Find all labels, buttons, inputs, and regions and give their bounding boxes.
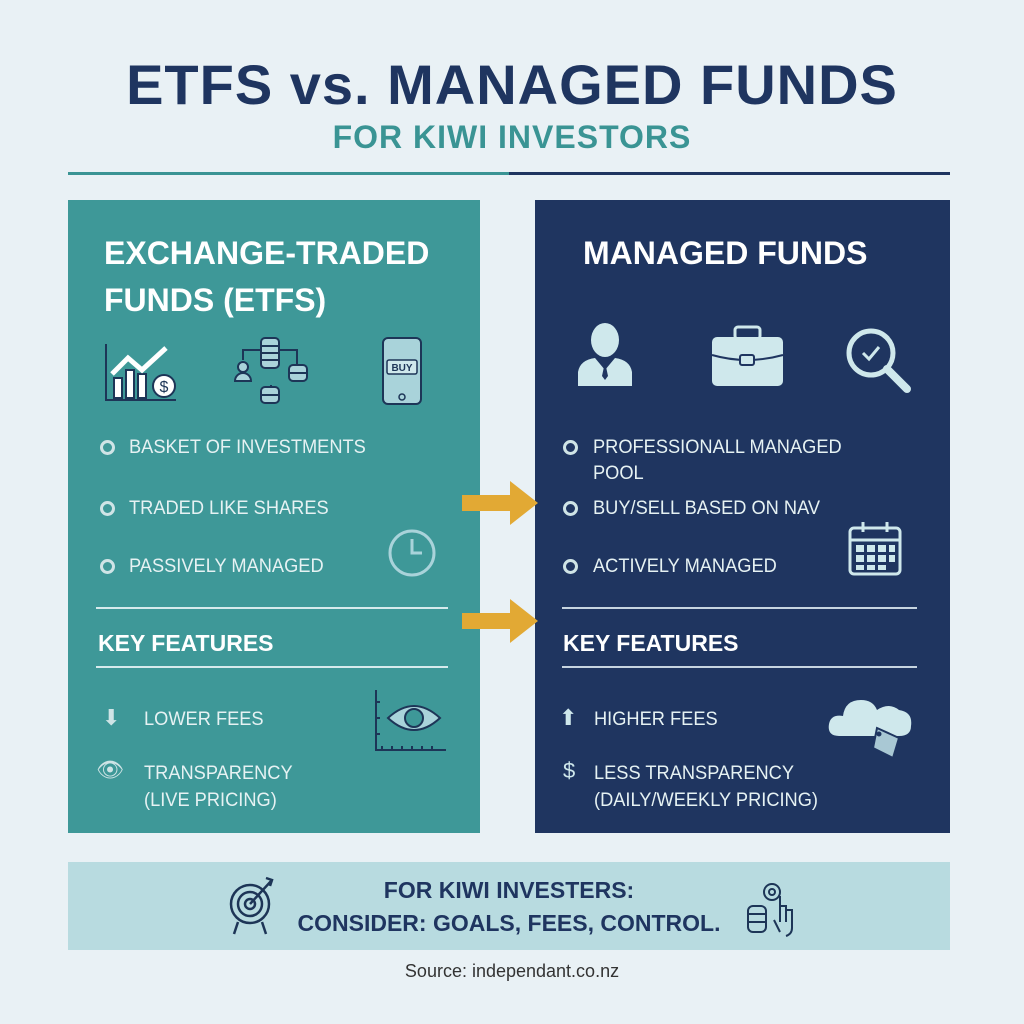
icon: manager	[578, 323, 632, 386]
icon: clock	[388, 530, 436, 576]
heading: ETFs: EXCHANGE-TRADED	[104, 235, 429, 271]
bullets: ETFs: PASSIVELY MANAGED	[129, 556, 324, 577]
features: ETFs: 👁	[96, 757, 124, 782]
icon: cloud tag	[828, 700, 912, 756]
banner: conclusion	[68, 862, 950, 950]
icon: gear coins hand	[747, 883, 793, 937]
features: managed: LESS TRANSPARENCY	[594, 763, 794, 784]
icon: calendar	[848, 522, 902, 576]
icon: growth chart	[105, 344, 176, 401]
heading: managed funds: MANAGED FUNDS	[583, 235, 867, 271]
bullets: ETFs: BASKET OF INVESTMENTS	[129, 437, 366, 458]
icon: phone buy	[382, 337, 422, 405]
bullets: ETFs	[100, 437, 366, 577]
icon: coins network	[234, 337, 308, 404]
arrow: upper	[462, 481, 538, 525]
title: ETFS vs. MANAGED FUNDS	[126, 53, 898, 116]
icon: target	[230, 876, 274, 934]
features: managed: (DAILY/WEEKLY PRICING)	[594, 790, 818, 811]
text: conclusion	[298, 877, 720, 936]
features: ETFs: LOWER FEES	[144, 709, 264, 730]
features: managed	[559, 705, 818, 811]
icon: briefcase	[712, 326, 783, 386]
text: conclusion: CONSIDER: GOALS, FEES, CONTROL.	[298, 910, 720, 936]
features: ETFs: TRANSPARENCY	[144, 763, 293, 784]
heading: ETFs: FUNDS (ETFS)	[104, 282, 326, 318]
arrow: lower	[462, 599, 538, 643]
bullets: ETFs: TRADED LIKE SHARES	[129, 498, 329, 519]
features: managed: ⬆	[559, 705, 577, 730]
heading: key features ETFs: KEY FEATURES	[98, 630, 274, 656]
bullets: managed	[563, 437, 842, 577]
features: ETFs	[96, 705, 293, 811]
features: ETFs: (LIVE PRICING)	[144, 790, 277, 811]
icon: eye chart	[375, 690, 446, 751]
icon: growth chart: $	[160, 379, 169, 396]
icon: magnifier check	[846, 328, 911, 393]
header rule	[68, 172, 950, 175]
panel: Managed funds	[535, 200, 950, 833]
features: ETFs: ⬇	[102, 705, 120, 730]
heading: ETFs	[104, 235, 429, 318]
features: managed: HIGHER FEES	[594, 709, 718, 730]
icon: phone buy: BUY	[391, 363, 413, 374]
subtitle: FOR KIWI INVESTORS	[333, 119, 691, 155]
source: Source: independant.co.nz	[405, 961, 619, 981]
bullets: managed: ACTIVELY MANAGED	[593, 556, 777, 577]
heading: key features managed: KEY FEATURES	[563, 630, 739, 656]
panel: ETFs	[68, 200, 480, 833]
features: managed: $	[563, 758, 575, 783]
bullets: managed: POOL	[593, 463, 644, 484]
bullets: managed: PROFESSIONALL MANAGED	[593, 437, 842, 458]
bullets: managed: BUY/SELL BASED ON NAV	[593, 498, 820, 519]
text: conclusion: FOR KIWI INVESTERS:	[384, 877, 634, 903]
